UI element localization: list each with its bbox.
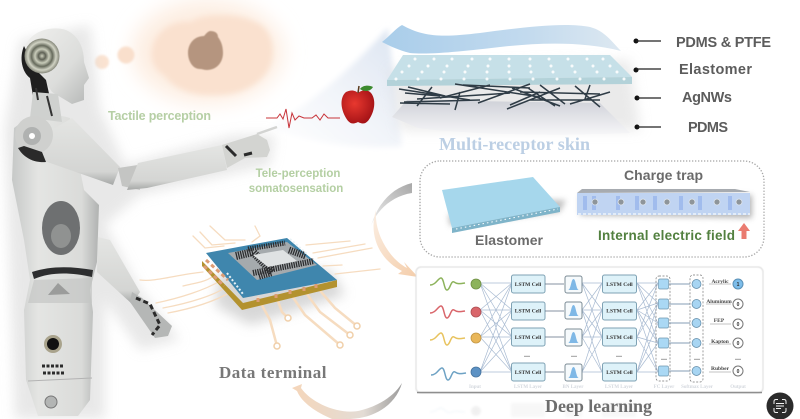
LSTM layer one	[512, 275, 545, 381]
robot	[5, 25, 277, 419]
robot upper arm	[33, 118, 120, 185]
tele-perception beam	[268, 28, 402, 147]
BN layer	[565, 276, 582, 381]
class labels: FEP	[714, 318, 725, 324]
LSTM labels one	[515, 282, 542, 376]
layer captions: Input	[469, 385, 481, 390]
label: elastomer: Elastomer	[475, 232, 544, 248]
thought cloud: imagined apple	[95, 0, 284, 104]
heading: deep learning: Deep learning	[545, 396, 652, 416]
signal waves	[430, 278, 466, 380]
LSTM labels one: LSTM Cell	[515, 308, 542, 314]
output nodes: 0	[737, 322, 740, 328]
panel: deep learning network	[416, 267, 763, 393]
FC layer	[656, 276, 670, 381]
LSTM labels two: LSTM Cell	[606, 370, 633, 376]
ellipses between rows: ...	[735, 353, 741, 362]
panel: multi-receptor skin layers	[382, 25, 640, 135]
panel: charge trap detail	[420, 161, 764, 257]
LSTM layer two	[602, 275, 636, 381]
class labels: Acrylic	[711, 279, 729, 285]
ellipses between rows: ...	[616, 350, 622, 359]
layer captions: LSTM Layer	[605, 385, 634, 390]
icon: scan button	[766, 392, 794, 419]
robot pelvis socket	[28, 335, 92, 408]
chip contacts	[204, 260, 316, 304]
chip shadow	[215, 270, 345, 325]
ellipses between rows: ...	[661, 353, 667, 362]
LSTM labels one: LSTM Cell	[515, 335, 542, 341]
chip pads	[227, 239, 307, 294]
icon: red apple	[342, 86, 374, 123]
heading: data terminal: Data terminal	[219, 363, 327, 382]
robot elbow	[118, 165, 140, 190]
arrow: grey curve to charge trap	[371, 183, 412, 226]
ellipses between rows	[524, 350, 741, 362]
arrow: curve back to data terminal	[292, 383, 402, 419]
label: tactile perception: Tactile perception	[108, 109, 211, 123]
chip package side	[202, 261, 337, 310]
class labels: Kapton	[711, 339, 729, 345]
LSTM labels one: LSTM Cell	[515, 370, 542, 376]
softmax layer	[690, 275, 703, 382]
chip wires	[140, 226, 380, 346]
LSTM labels two: LSTM Cell	[606, 335, 633, 341]
dotted frame	[420, 161, 764, 257]
layer captions	[469, 385, 746, 390]
LSTM labels two	[606, 282, 633, 376]
ellipses between rows: ...	[524, 350, 530, 359]
robot head	[22, 28, 89, 104]
robot forearm	[127, 145, 227, 190]
label: internal electric field: Internal electric field	[598, 228, 735, 243]
robot lower arm and hand	[97, 237, 172, 338]
LSTM labels two: LSTM Cell	[606, 308, 633, 314]
class labels	[706, 279, 732, 372]
ellipses between rows: ...	[571, 350, 577, 359]
robot torso	[12, 115, 99, 416]
layer captions: FC Layer	[654, 385, 675, 390]
output nodes: 0	[737, 341, 740, 347]
robot shadow	[5, 25, 275, 419]
label: tele-perception somatosensation: somatosensation	[249, 183, 343, 195]
panel card	[416, 267, 763, 393]
layer legend	[634, 35, 771, 136]
legend: AgNWs: AgNWs	[682, 90, 732, 106]
output nodes: 0	[737, 302, 740, 308]
robot waist	[28, 267, 93, 303]
chip die	[228, 242, 317, 280]
layer: silver nanowires	[399, 84, 610, 110]
input nodes	[471, 279, 481, 377]
charge trap block	[577, 189, 752, 218]
robot neck	[30, 92, 62, 122]
robot chest oval	[42, 201, 80, 255]
label: tele-perception somatosensation: Tele-perception	[256, 168, 340, 180]
arrow: peach curve to deep learning	[374, 210, 418, 277]
layer captions: Softmax Layer	[681, 385, 714, 390]
legend: PDMS: PDMS	[688, 120, 728, 136]
elastomer block	[442, 177, 566, 233]
layer captions: BN Layer	[563, 385, 584, 390]
network connections	[480, 283, 658, 372]
output nodes: 0	[737, 369, 740, 375]
arrows to softmax	[669, 284, 690, 371]
class labels: Aluminum	[706, 299, 732, 305]
legend: elastomer: Elastomer	[679, 62, 752, 78]
layer captions: LSTM Layer	[514, 385, 543, 390]
legend: PDMS and PTFE: PDMS & PTFE	[676, 35, 771, 51]
heartbeat signal	[266, 109, 340, 128]
robot shoulder	[15, 116, 53, 162]
output nodes	[733, 279, 743, 376]
layer: PDMS and PTFE wave	[382, 25, 621, 54]
output nodes: 1	[737, 282, 740, 288]
layer: PDMS base	[392, 100, 630, 135]
heading: multi-receptor skin: Multi-receptor skin	[439, 134, 590, 154]
label: charge trap: Charge trap	[624, 167, 703, 183]
layer captions: Output	[730, 385, 746, 390]
chip blue top	[206, 238, 337, 298]
class labels: Rubber	[711, 366, 730, 372]
layer: elastomer with receptors	[387, 55, 632, 86]
arrows to BN layer	[545, 284, 564, 372]
panel reflection	[430, 403, 636, 417]
robot pointing hand	[222, 127, 277, 168]
arrow: red field arrow	[738, 223, 750, 239]
skin shadow	[390, 60, 640, 130]
chip: data terminal	[140, 226, 380, 349]
LSTM labels one: LSTM Cell	[515, 282, 542, 288]
LSTM labels two: LSTM Cell	[606, 282, 633, 288]
ellipses between rows: ...	[694, 353, 700, 362]
